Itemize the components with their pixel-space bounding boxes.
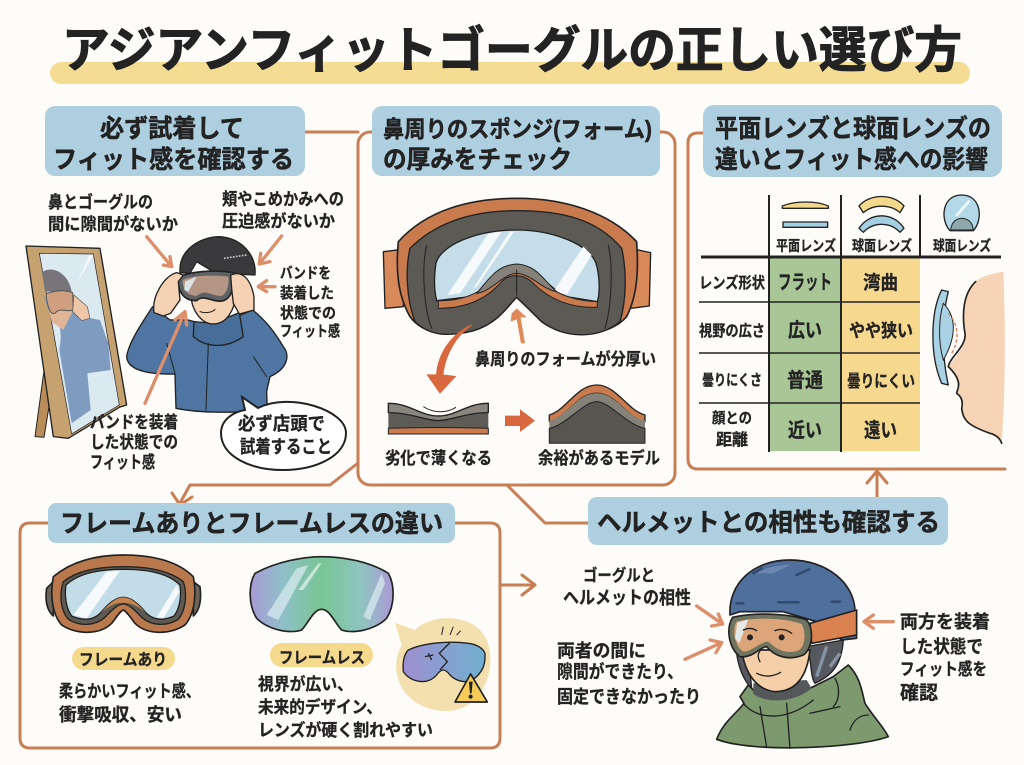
- panel: helmet compatibility: [557, 497, 990, 748]
- labels: frameless: [258, 643, 433, 740]
- arrows: fit checkpoints: [145, 236, 282, 403]
- comparison table: [699, 195, 1001, 452]
- labels: framed: 柔らかいフィット感、: [59, 681, 200, 701]
- callout: try in store: 試着すること: [240, 437, 332, 457]
- arrows: helmet callouts: [685, 606, 893, 659]
- callouts: fit checkpoints: 頬やこめかみへの: [222, 190, 344, 209]
- heading: lens: 違いとフィット感への影響: [715, 146, 988, 174]
- callouts: fit checkpoints: バンドを装着: [90, 412, 178, 432]
- panel: nose foam thickness: [358, 106, 675, 485]
- comparison table: 曇りにくい: [847, 372, 915, 391]
- heading: frame: フレームありとフレームレスの違い: [60, 510, 443, 538]
- callouts: fit checkpoints: フィット感: [280, 322, 340, 340]
- comparison table: フラット: [778, 272, 832, 294]
- callouts: fit checkpoints: 圧迫感がないか: [222, 211, 335, 231]
- comparison table: 遠い: [864, 419, 897, 442]
- labels: frameless: フレームレス: [279, 650, 365, 667]
- callouts: fit checkpoints: フィット感: [90, 452, 155, 472]
- heading: try on: フィット感を確認する: [53, 146, 294, 174]
- illustration: large goggles: [383, 198, 651, 443]
- panel: try on and check fit: [26, 106, 346, 472]
- labels: foam: 鼻周りのフォームが分厚い: [475, 349, 656, 369]
- labels: frameless: 未来的デザイン、: [258, 697, 382, 717]
- icons: lens shapes and face profile: [782, 195, 1005, 443]
- illustration: frameless goggles: [250, 557, 393, 631]
- comparison table: 球面レンズ: [852, 237, 912, 255]
- labels: frameless: レンズが硬く割れやすい: [258, 720, 433, 740]
- callouts: helmet: 隙間ができたり、: [557, 661, 683, 682]
- heading: nose foam: の厚みをチェック: [383, 146, 572, 174]
- callouts: fit checkpoints: 間に隙間がないか: [48, 214, 178, 234]
- comparison table: 曇りにくさ: [702, 372, 762, 389]
- labels: framed: [59, 647, 200, 725]
- heading: lens: 平面レンズと球面レンズの: [715, 114, 991, 143]
- labels: framed: フレームあり: [79, 651, 167, 669]
- comparison table: 顔との: [712, 410, 752, 427]
- heading: helmet: [588, 497, 948, 545]
- comparison table: 視野の広さ: [699, 322, 765, 340]
- callouts: helmet: 両者の間に: [557, 641, 646, 661]
- heading: nose foam: 鼻周りのスポンジ(フォーム): [383, 116, 652, 142]
- labels: frameless: 視界が広い、: [258, 674, 353, 694]
- comparison table: 湾曲: [863, 272, 898, 294]
- labels: foam: 劣化で薄くなる: [385, 449, 492, 468]
- comparison table: 広い: [788, 319, 822, 342]
- comparison table: 普通: [787, 369, 823, 392]
- callouts: fit checkpoints: 装着した: [280, 284, 334, 302]
- callouts: helmet: 両方を装着: [900, 611, 990, 632]
- labels: foam: [385, 349, 660, 468]
- connector lines between panels: [172, 132, 887, 595]
- callouts: helmet: した状態で: [900, 636, 983, 657]
- illustration: mirror reflection: [26, 246, 127, 438]
- illustration: person with helmet: [717, 560, 888, 748]
- callouts: fit checkpoints: 鼻とゴーグルの: [48, 192, 153, 212]
- callout: try in store: 必ず店頭で: [238, 414, 325, 434]
- comparison table: 平面レンズ: [776, 237, 836, 255]
- callouts: helmet: 固定できなかったり: [557, 687, 701, 707]
- callouts: helmet: フィット感を: [900, 659, 987, 679]
- illustration: framed goggles: [46, 555, 201, 632]
- labels: foam: 余裕があるモデル: [538, 448, 660, 468]
- illustration: person trying goggles: [127, 237, 287, 412]
- callouts: helmet: 確認: [900, 682, 938, 704]
- callouts: fit checkpoints: バンドを: [280, 265, 331, 282]
- panel: framed vs frameless: [20, 503, 500, 748]
- title: アジアンフィットゴーグルの正しい選び方: [62, 24, 962, 78]
- heading: nose foam: [372, 106, 660, 176]
- heading: lens: [703, 105, 1002, 177]
- callouts: fit checkpoints: した状態での: [90, 433, 178, 452]
- comparison table: 近い: [788, 419, 822, 442]
- callouts: helmet: ヘルメットの相性: [563, 588, 691, 608]
- heading: frame: [48, 503, 455, 543]
- callouts: helmet: ゴーグルと: [583, 565, 655, 585]
- comparison table: 距離: [716, 431, 748, 449]
- comparison table: 球面レンズ: [933, 237, 991, 255]
- labels: framed: 衝撃吸収、安い: [59, 705, 182, 725]
- callout: broken lens warning: [395, 618, 490, 711]
- heading: helmet: ヘルメットとの相性も確認する: [597, 509, 940, 537]
- callouts: fit checkpoints: [48, 190, 344, 472]
- comparison table: レンズ形状: [699, 273, 765, 292]
- comparison table: やや狭い: [849, 321, 913, 341]
- callout: try in store: [221, 397, 346, 470]
- callouts: helmet: [557, 565, 990, 707]
- callouts: fit checkpoints: 状態での: [280, 304, 336, 322]
- heading: try on: 必ず試着して: [100, 115, 244, 143]
- panel: flat vs spherical lens: [688, 105, 1005, 469]
- heading: try on: [45, 106, 305, 176]
